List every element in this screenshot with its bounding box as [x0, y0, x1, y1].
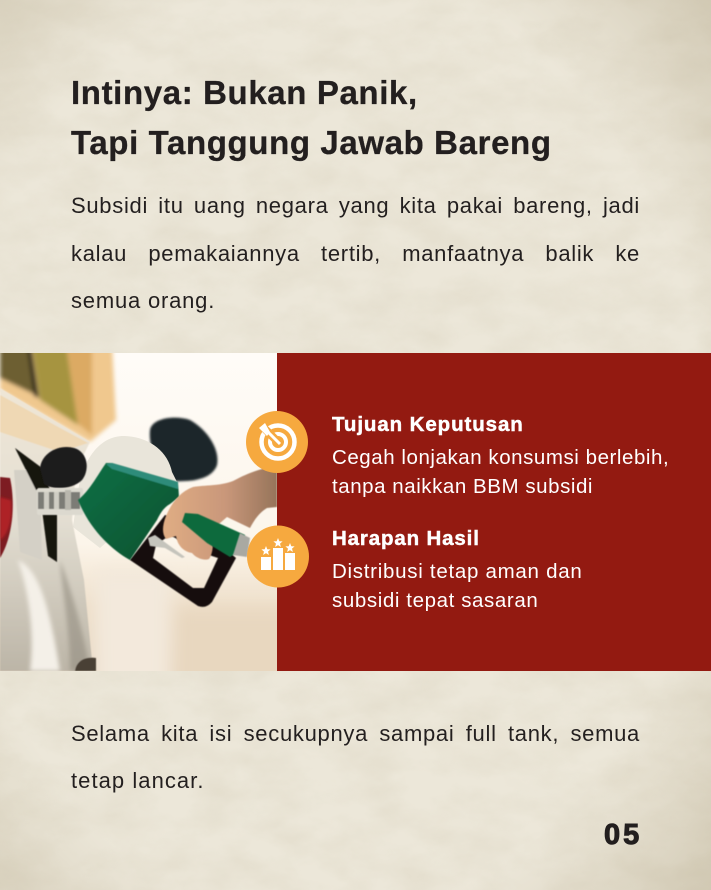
blurred background car [92, 588, 277, 671]
car body [0, 388, 96, 671]
block: tujuan keputusan [332, 413, 669, 498]
green nozzle body [78, 463, 179, 560]
red panel [277, 353, 711, 671]
tail light [0, 477, 13, 558]
blurred mirror [150, 418, 217, 481]
closing paragraph: tetap lancar. [71, 768, 205, 793]
closing paragraph [71, 721, 640, 793]
photo: hand refuelling a car [0, 353, 277, 671]
fuel door [73, 436, 178, 548]
hand and arm [163, 466, 277, 560]
block: harapan hasil: Distribusi tetap aman dan [332, 560, 582, 583]
title: Intinya: Bukan Panik, [71, 74, 418, 111]
green lever [182, 513, 245, 557]
intro paragraph [71, 193, 640, 313]
block: harapan hasil: Harapan Hasil [332, 527, 480, 550]
fuel opening and flap [14, 448, 57, 562]
intro paragraph: Subsidi itu uang negara yang kita pakai bareng, jadi [71, 193, 640, 218]
icon: podium with stars [247, 526, 309, 588]
title [71, 74, 552, 162]
closing paragraph: Selama kita isi secukupnya sampai full tank, semua [71, 721, 640, 746]
silver hose collar [233, 533, 250, 557]
blurred car window [0, 345, 116, 442]
block: tujuan keputusan: Cegah lonjakan konsumsi berlebih, [332, 446, 669, 469]
title: Tapi Tanggung Jawab Bareng [71, 124, 552, 161]
block: tujuan keputusan: tanpa naikkan BBM subsidi [332, 475, 593, 498]
fuel cap [40, 447, 87, 488]
intro paragraph: kalau pemakaiannya tertib, manfaatnya balik ke [71, 241, 640, 266]
block: harapan hasil [332, 527, 582, 612]
page number: 05 [604, 819, 642, 851]
block: tujuan keputusan: Tujuan Keputusan [332, 413, 524, 436]
nozzle spout [37, 488, 83, 515]
intro paragraph: semua orang. [71, 288, 215, 313]
silver trigger [148, 535, 185, 558]
block: harapan hasil: subsidi tepat sasaran [332, 589, 538, 612]
black handle frame [130, 515, 236, 607]
icon: target [246, 411, 308, 473]
